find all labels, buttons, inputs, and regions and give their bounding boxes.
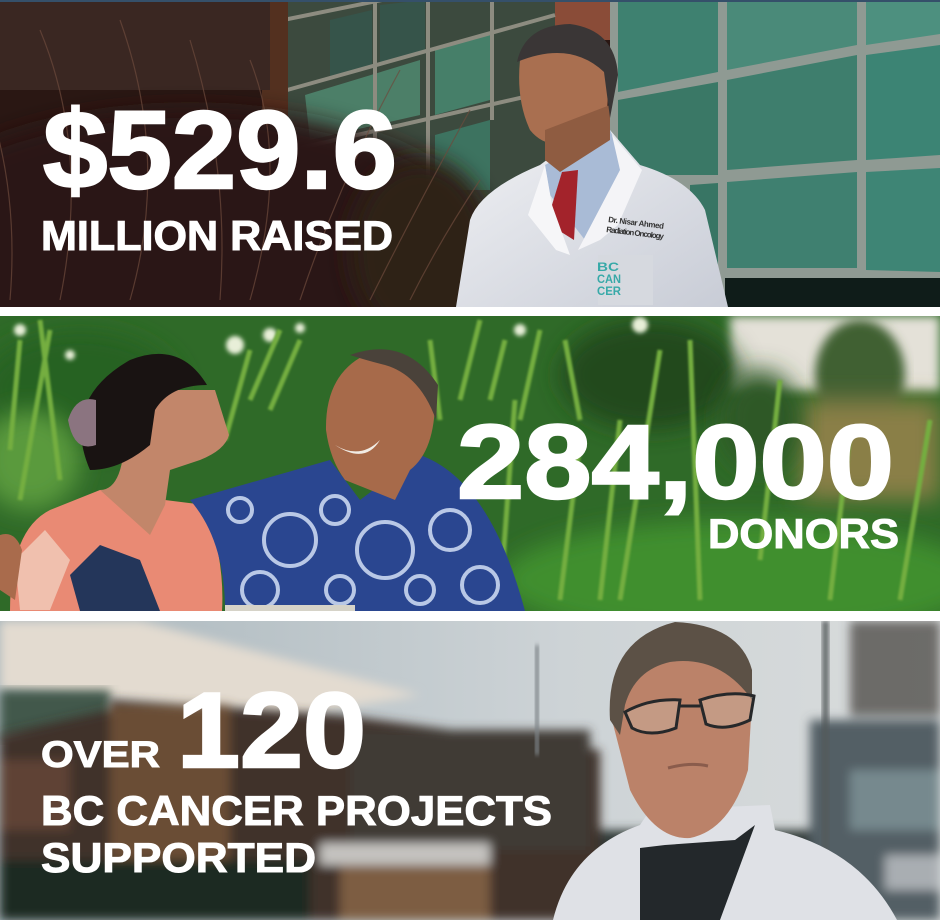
label: million raised: MILLION RAISED <box>41 212 393 259</box>
photo background: blurred hospital buildings <box>0 621 940 920</box>
panel: donors <box>0 316 940 640</box>
photo: doctor in white coat: Dr. Nisar Ahmed <box>608 215 665 231</box>
label: donors: DONORS <box>708 510 899 557</box>
photo: woman <box>10 354 229 611</box>
photo: man in paisley shirt <box>0 349 525 611</box>
photo: doctor in white coat <box>456 24 728 307</box>
panel: funds raised <box>0 0 940 307</box>
photo background: building and shrubs <box>0 0 940 307</box>
label: BC cancer projects: BC CANCER PROJECTS <box>41 787 552 834</box>
photo: man with glasses <box>553 622 897 920</box>
label: over: OVER <box>41 734 160 775</box>
stat: $529.6: $529.6 <box>43 89 397 212</box>
stat: 284,000: 284,000 <box>457 404 894 521</box>
photo: doctor in white coat: BC <box>597 260 619 274</box>
photo: doctor in white coat: Radiation Oncology <box>606 225 665 241</box>
photo: doctor in white coat: CAN <box>597 272 621 286</box>
photo background: green reeds <box>0 316 940 640</box>
photo: doctor in white coat: CER <box>597 284 621 298</box>
panel: projects supported <box>0 621 940 920</box>
label: supported: SUPPORTED <box>41 834 316 881</box>
stat: 120: 120 <box>177 670 366 790</box>
